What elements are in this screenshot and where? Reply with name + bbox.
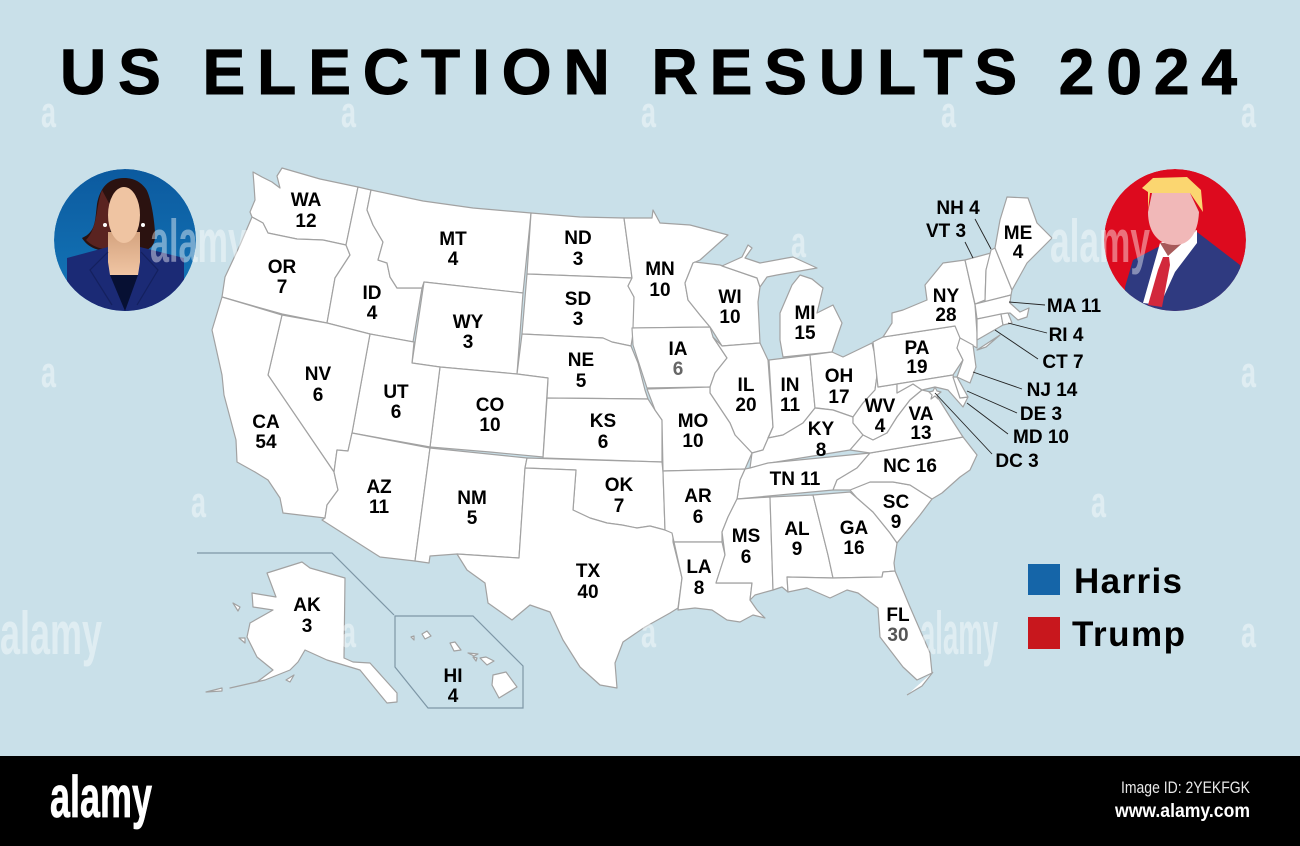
legend label: Trump: Trump — [1072, 615, 1185, 654]
state: Utah: UT — [383, 382, 409, 403]
state: California: CA — [252, 412, 280, 433]
callout labels: small northeast states: MD 10 — [1013, 427, 1069, 448]
state: New Mexico: NM — [457, 488, 487, 509]
state: Texas: 40 — [577, 582, 599, 603]
state: Pennsylvania: PA — [905, 338, 930, 359]
state: Washington: WA — [291, 190, 322, 211]
state: Hawaii — [411, 631, 517, 707]
stock watermark: alamy — [150, 208, 247, 275]
callout labels: small northeast states: CT 7 — [1042, 352, 1084, 373]
stock watermark: a — [1241, 348, 1256, 397]
portrait: Trump — [1104, 169, 1246, 311]
state: Virginia — [850, 390, 963, 453]
state: Indiana: IN — [780, 375, 800, 396]
state: Colorado: CO — [476, 395, 504, 416]
state: Iowa: IA — [668, 339, 688, 360]
state: Mississippi: MS — [732, 526, 760, 547]
state: West Virginia — [853, 368, 922, 440]
state: Delaware — [953, 377, 968, 398]
state: North Carolina: NC 16 — [883, 456, 937, 477]
state: Illinois — [710, 337, 773, 453]
state: Louisiana: LA — [686, 557, 712, 578]
state: Utah: 6 — [391, 402, 401, 423]
state: Alabama — [770, 495, 833, 592]
legend swatch: Trump — [1028, 617, 1060, 649]
legend — [1028, 562, 1185, 654]
state: North Dakota: 3 — [573, 249, 583, 270]
state: Indiana: 11 — [780, 395, 800, 416]
state: Minnesota: MN — [645, 259, 675, 280]
state: Florida: FL — [886, 605, 910, 626]
callout labels: small northeast states: VT 3 — [926, 221, 966, 242]
portrait: Harris — [54, 169, 196, 312]
state: Hawaii: HI — [444, 666, 462, 687]
state: North Dakota — [527, 213, 632, 278]
state: New York: NY — [933, 286, 960, 307]
state: Alaska: 3 — [302, 616, 312, 637]
state: Kansas: KS — [590, 411, 616, 432]
state: Georgia: GA — [840, 518, 869, 539]
state: Texas — [457, 468, 682, 688]
state: Kentucky: KY — [808, 419, 835, 440]
state: Pennsylvania: 19 — [906, 357, 928, 378]
stock watermark: alamy — [1050, 208, 1150, 275]
state: South Dakota: SD — [565, 289, 591, 310]
state: Kansas: 6 — [598, 432, 608, 453]
state: Wyoming: 3 — [463, 332, 473, 353]
state: Arkansas: AR — [684, 486, 712, 507]
state: Alaska: AK — [293, 595, 321, 616]
state: Indiana — [768, 355, 815, 438]
callout labels: small northeast states — [926, 198, 1102, 472]
state: Missouri — [647, 387, 752, 471]
state: Ohio: OH — [825, 366, 853, 387]
state: Louisiana — [674, 542, 765, 622]
leader lines: small northeast states — [935, 219, 1047, 454]
state: Washington: 12 — [295, 211, 317, 232]
state: Mississippi — [716, 497, 773, 600]
state: Texas: TX — [576, 561, 600, 582]
state: North Dakota: ND — [564, 228, 592, 249]
state: Idaho: ID — [362, 283, 382, 304]
legend swatch: Harris — [1028, 564, 1060, 595]
stock watermark: a — [1091, 478, 1106, 527]
footer image id: Image ID: 2YEKFGK — [1121, 778, 1251, 797]
state: New York: 28 — [935, 305, 957, 326]
state: Wyoming — [412, 282, 523, 374]
state: Nevada: NV — [305, 364, 332, 385]
state: Wisconsin — [685, 262, 760, 346]
state: New Mexico — [415, 448, 527, 563]
state: Maine — [995, 197, 1052, 290]
state: District of Columbia — [929, 387, 941, 399]
state: South Carolina: 9 — [891, 512, 901, 533]
state: Arizona: 11 — [369, 497, 389, 518]
state: Illinois: IL — [738, 375, 755, 396]
state: Florida — [787, 571, 933, 695]
state: Ohio — [810, 343, 878, 417]
state: South Carolina — [850, 482, 932, 543]
state: Colorado: 10 — [479, 415, 501, 436]
state: Idaho — [327, 187, 422, 342]
state: California: 54 — [255, 432, 277, 453]
state: Nevada: 6 — [313, 385, 323, 406]
stock watermark: a — [341, 88, 356, 137]
stock watermark: alamy — [920, 600, 998, 667]
state: New Hampshire — [985, 248, 1012, 302]
state: Ohio: 17 — [828, 387, 850, 408]
callout labels: small northeast states: NH 4 — [936, 198, 980, 219]
legend label: Harris: Harris — [1074, 562, 1182, 601]
state: North Carolina — [833, 437, 977, 499]
state: Hawaii: 4 — [448, 686, 459, 707]
state: Colorado — [430, 367, 548, 457]
state: Georgia — [813, 492, 897, 578]
state: Iowa: 6 — [673, 359, 683, 380]
state: Wisconsin: WI — [718, 287, 742, 308]
state: Pennsylvania — [873, 326, 963, 387]
stock watermark: a — [191, 478, 206, 527]
state: Maine: 4 — [1013, 242, 1024, 263]
callout labels: small northeast states: DC 3 — [995, 451, 1039, 472]
state: Tennessee: TN 11 — [770, 469, 821, 490]
state: Iowa — [632, 327, 727, 388]
state: Illinois: 20 — [735, 395, 757, 416]
state: New York — [883, 260, 1000, 350]
state: Alabama: 9 — [792, 539, 802, 560]
stock watermark: a — [641, 608, 656, 657]
state: South Dakota: 3 — [573, 309, 583, 330]
state: Louisiana: 8 — [694, 578, 704, 599]
state: Virginia: 13 — [910, 423, 932, 444]
state: Alabama: AL — [784, 519, 810, 540]
state: Rhode Island — [1001, 313, 1012, 325]
state: New Jersey — [957, 338, 976, 383]
state: Vermont — [965, 253, 991, 304]
state: Oregon: 7 — [277, 277, 287, 298]
state: Montana: MT — [439, 229, 467, 250]
state: Nevada — [268, 315, 370, 472]
state: Michigan — [722, 245, 842, 357]
map: United States electoral votes — [197, 168, 1052, 708]
state: West Virginia: WV — [865, 396, 896, 417]
state: Nebraska: NE — [568, 350, 594, 371]
stock watermark — [0, 88, 1256, 667]
stock watermark: a — [41, 88, 56, 137]
footer url: www.alamy.com — [1114, 801, 1250, 822]
state: Mississippi: 6 — [741, 547, 751, 568]
state: Tennessee — [737, 453, 870, 499]
state: Utah — [352, 334, 440, 447]
stock watermark: a — [1241, 608, 1256, 657]
footer bar — [0, 756, 1300, 846]
stock watermark: alamy — [0, 600, 102, 667]
stock watermark: a — [1241, 88, 1256, 137]
state: Alaska — [206, 562, 397, 703]
state: Arkansas: 6 — [693, 507, 703, 528]
inset frame: Alaska and Hawaii — [197, 553, 523, 708]
stock watermark: a — [641, 88, 656, 137]
state: West Virginia: 4 — [875, 416, 886, 437]
state: Nebraska: 5 — [576, 371, 587, 392]
state: Oregon — [222, 217, 350, 323]
stock watermark: a — [791, 218, 806, 267]
state: Montana: 4 — [448, 249, 459, 270]
state: Idaho: 4 — [367, 303, 378, 324]
state: Michigan: MI — [794, 303, 816, 324]
stock watermark: a — [41, 348, 56, 397]
state: Massachusetts — [975, 295, 1029, 320]
state: Wisconsin: 10 — [719, 307, 741, 328]
state: Florida: 30 — [887, 625, 909, 646]
title: US ELECTION RESULTS 2024 — [60, 36, 1237, 108]
state: Kansas — [543, 398, 662, 462]
callout labels: small northeast states: RI 4 — [1049, 325, 1084, 346]
state: Kentucky — [750, 408, 863, 468]
stock watermark: a — [341, 608, 356, 657]
stock watermark: a — [941, 88, 956, 137]
state: New Mexico: 5 — [467, 508, 478, 529]
state: Oklahoma — [525, 458, 665, 530]
state: Montana — [367, 190, 531, 293]
state: Michigan: 15 — [794, 323, 816, 344]
callout labels: small northeast states: DE 3 — [1020, 404, 1062, 425]
state: Georgia: 16 — [843, 538, 865, 559]
state: South Dakota — [522, 274, 634, 346]
state: California — [212, 297, 338, 518]
state: Nebraska — [517, 334, 648, 399]
callout labels: small northeast states: MA 11 — [1047, 296, 1102, 317]
state: Oklahoma: OK — [605, 475, 634, 496]
state: Washington — [250, 168, 358, 245]
state: Minnesota — [624, 210, 728, 328]
state: Connecticut — [977, 314, 1003, 340]
state: Arizona — [322, 433, 430, 561]
state: Arizona: AZ — [366, 477, 392, 498]
footer logo: alamy — [50, 765, 152, 830]
state: South Carolina: SC — [883, 492, 909, 513]
state: Oregon: OR — [268, 257, 297, 278]
state: Missouri: MO — [678, 411, 708, 432]
state: Virginia: VA — [909, 404, 934, 425]
state: Wyoming: WY — [453, 312, 484, 333]
state: Kentucky: 8 — [816, 440, 826, 461]
state: Maryland — [897, 375, 968, 407]
state: Missouri: 10 — [682, 431, 704, 452]
state: Maine: ME — [1004, 223, 1032, 244]
state: Minnesota: 10 — [649, 280, 671, 301]
state: Oklahoma: 7 — [614, 496, 624, 517]
callout labels: small northeast states: NJ 14 — [1027, 380, 1078, 401]
state: Arkansas — [663, 469, 745, 542]
